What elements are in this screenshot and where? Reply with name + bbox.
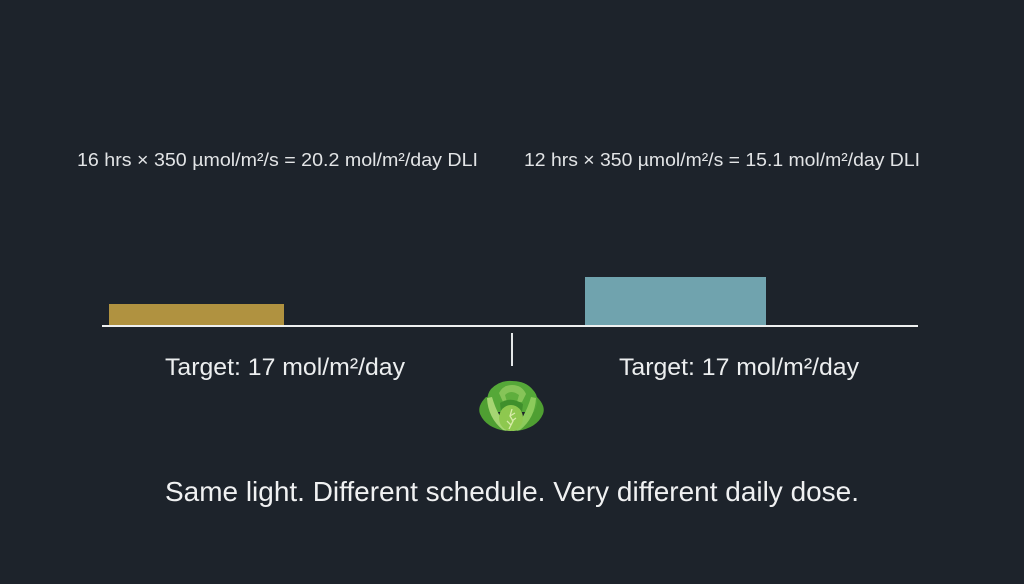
balance beam <box>102 325 918 327</box>
right bar: teal <box>585 277 766 326</box>
left target label: Target: 17 mol/m²/day <box>165 354 406 381</box>
left bar: gold <box>109 304 284 326</box>
right target label: Target: 17 mol/m²/day <box>619 354 860 381</box>
icon: lettuce <box>479 381 544 431</box>
right formula text: 12 hrs × 350 µmol/m²/s = 15.1 mol/m²/day DLI <box>524 149 920 170</box>
left formula text: 16 hrs × 350 µmol/m²/s = 20.2 mol/m²/day DLI <box>77 149 478 170</box>
fulcrum line <box>511 333 513 366</box>
caption: Same light. Different schedule. Very different daily dose. <box>165 476 859 507</box>
